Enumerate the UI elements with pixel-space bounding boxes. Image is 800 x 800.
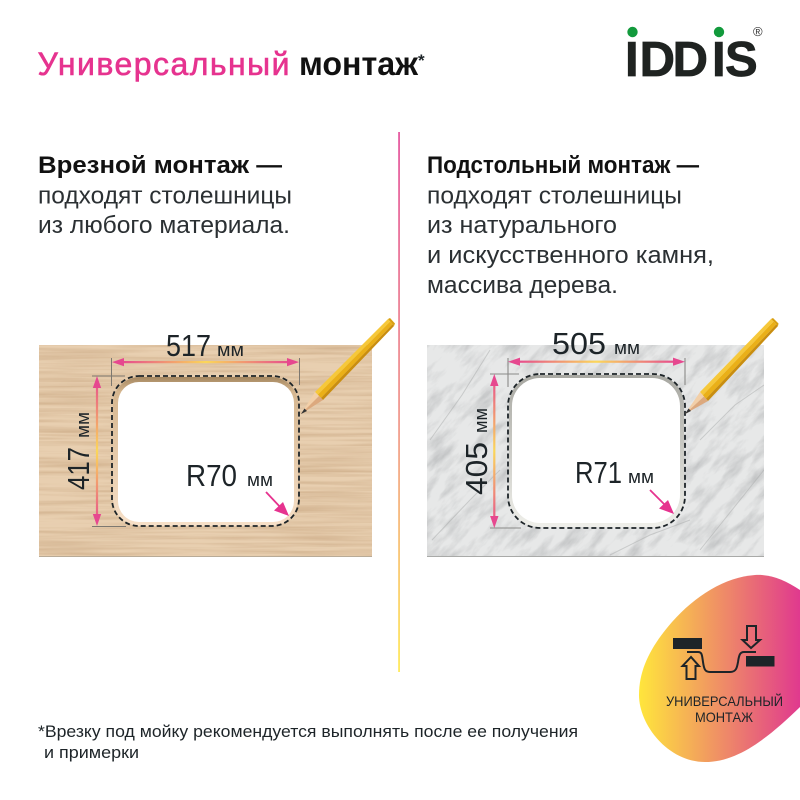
title [38,45,425,82]
title: * [418,51,425,70]
width label: 517 [166,328,211,363]
width label: мм [217,340,244,360]
text block: flush mount [38,152,292,239]
wood board [39,345,372,557]
width arrow [508,358,685,366]
gradient blob [639,575,800,762]
marble board [427,345,764,557]
height label [459,408,494,495]
radius label: мм [247,470,273,490]
cutout [112,376,299,526]
radius arrow [266,492,289,516]
radius label: мм [628,467,654,487]
extension lines [490,358,685,528]
text block: flush mount: из любого материала. [38,212,290,239]
title: монтаж [299,45,419,82]
footnote [38,722,578,762]
icon: counter and sink section [673,626,774,679]
radius arrow [650,490,674,514]
footnote: *Врезку под мойку рекомендуется выполнять после ее получения [38,722,578,741]
width label [552,326,640,361]
extension lines [92,358,300,526]
height label: 417 [61,447,96,490]
height label: 405 [459,442,494,495]
text block: flush mount: подходят столешницы [38,182,292,210]
height label: мм [73,412,93,438]
center divider [398,132,400,672]
radius label: R70 [186,458,237,493]
text block: flush mount: Врезной монтаж — [38,152,283,179]
width label: 505 [552,326,606,361]
logo: IDDIS: IDDIS [625,33,758,87]
badge label: МОНТАЖ [695,709,753,725]
text block: undermount: Подстольный монтаж — [427,152,699,179]
height arrow [490,374,498,528]
pencil [301,318,395,414]
radius label: R71 [575,455,622,490]
height arrow [93,376,101,526]
text block: undermount: и искусственного камня, [427,242,714,269]
badge: universal mounting [639,575,800,762]
text block: undermount: из натурального [427,212,617,239]
pencil [685,318,778,414]
height label: мм [471,408,491,433]
badge label: УНИВЕРСАЛЬНЫЙ [666,692,783,709]
panel: wood countertop diagram [39,318,395,557]
panel: marble countertop diagram [427,318,778,557]
text block: undermount: подходят столешницы [427,182,682,210]
footnote: и примерки [44,743,139,762]
height label [61,412,96,490]
radius label [186,458,273,493]
title: Универсальный [38,46,290,82]
text block: undermount: массива дерева. [427,272,618,299]
badge label [666,692,783,725]
width arrow [112,358,299,366]
text block: undermount [427,152,714,299]
width label: мм [614,338,640,358]
cutout [508,374,685,528]
width label [166,328,244,363]
logo: IDDIS: ® [753,24,763,39]
